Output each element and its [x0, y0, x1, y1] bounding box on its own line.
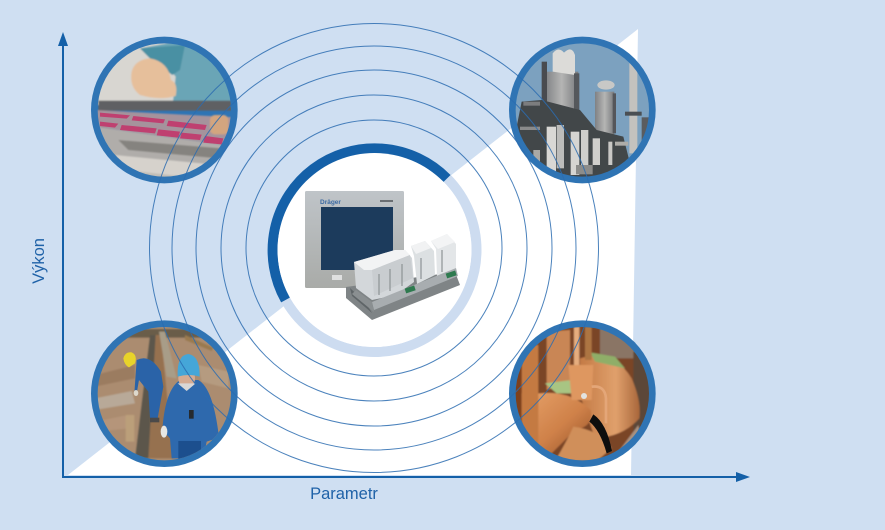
- x axis label: Parametr: [310, 485, 378, 503]
- y axis with arrow: [58, 32, 68, 478]
- controller modules: [346, 234, 460, 320]
- photo: gloved hand over blister packs: [91, 36, 238, 184]
- photo: copper brewing kettles: [509, 320, 656, 467]
- photo: workers at a water basin: [91, 320, 238, 467]
- central ring: dark arc: [273, 148, 447, 300]
- white triangle area: [68, 29, 638, 475]
- x axis with arrow: [62, 472, 750, 482]
- touch panel monitor: Dräger: [320, 199, 341, 206]
- y axis label: Výkon: [30, 238, 48, 284]
- central ring: light part: [272, 148, 476, 352]
- central white disc and device: [278, 153, 472, 347]
- touch panel monitor: [305, 191, 404, 288]
- concentric signal rings: [150, 24, 598, 472]
- photo: refinery: [509, 36, 656, 184]
